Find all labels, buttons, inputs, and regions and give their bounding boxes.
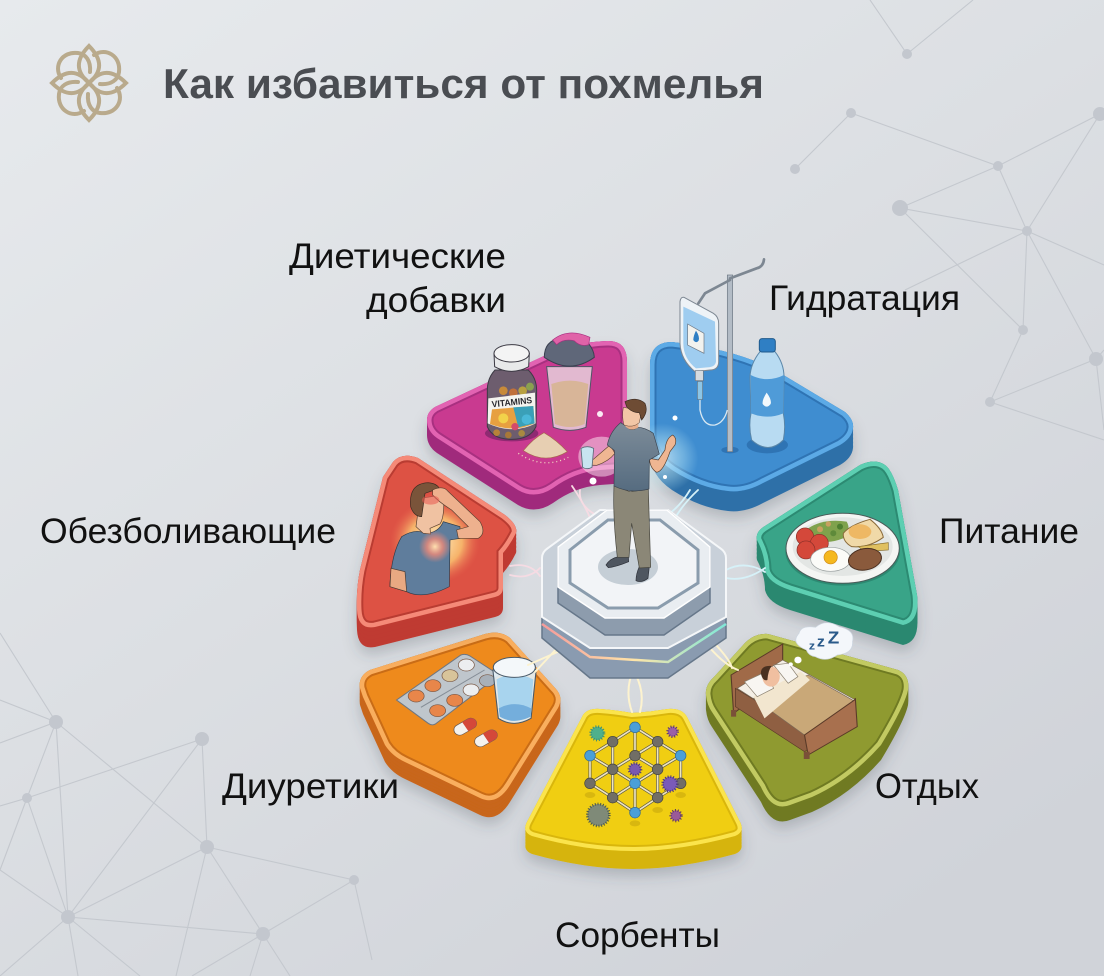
icon: sleep cloud: z	[809, 639, 815, 652]
panel: dietary supplements	[427, 333, 627, 510]
sparkles	[590, 411, 678, 484]
icon: sleep cloud	[789, 623, 853, 666]
icon: man with headache	[390, 483, 483, 595]
icon: water glass in hand	[581, 447, 594, 469]
label: Сорбенты: Сорбенты	[555, 916, 720, 955]
label: Отдых: Отдых	[875, 767, 979, 806]
upper tier	[558, 510, 710, 635]
energy connectors	[510, 486, 765, 712]
label: Обезболивающие: Обезболивающие	[40, 512, 336, 551]
label: Гидратация: Гидратация	[769, 279, 960, 318]
icon: blister pack	[397, 654, 499, 725]
panel: painkillers	[357, 456, 516, 647]
icon: molecular lattice with viruses	[585, 722, 686, 826]
panel: diuretics	[360, 633, 560, 817]
icon: bed with sleeper	[731, 644, 857, 759]
panel: hydration	[650, 259, 853, 511]
label: Диетические добавки	[289, 237, 506, 320]
icon: protein shaker	[544, 333, 594, 430]
icon: sleep cloud: z	[817, 634, 825, 650]
label: Диетические добавки: Диетические	[289, 237, 506, 276]
icon: water bottle	[747, 339, 788, 453]
man figure	[578, 399, 698, 582]
label: Питание: Питание	[939, 512, 1079, 551]
lower tier	[542, 560, 726, 678]
icon: glass of water	[493, 657, 536, 723]
panel: rest	[706, 623, 908, 822]
label: Диуретики: Диуретики	[222, 767, 399, 806]
label: Диетические добавки: добавки	[366, 281, 506, 320]
icon: powder pile	[518, 433, 568, 463]
icon: IV drip stand	[680, 259, 764, 453]
icon: sleep cloud: Z	[828, 628, 839, 647]
panel: nutrition	[757, 462, 917, 645]
icon: vitamins jar: VITAMINS	[491, 395, 533, 409]
panel: sorbents	[525, 709, 742, 869]
central platform	[542, 510, 726, 678]
icon: capsules	[452, 716, 500, 749]
title: Как избавиться от похмелья	[163, 60, 764, 107]
icon: plate of food	[785, 513, 900, 586]
logo	[52, 46, 126, 120]
